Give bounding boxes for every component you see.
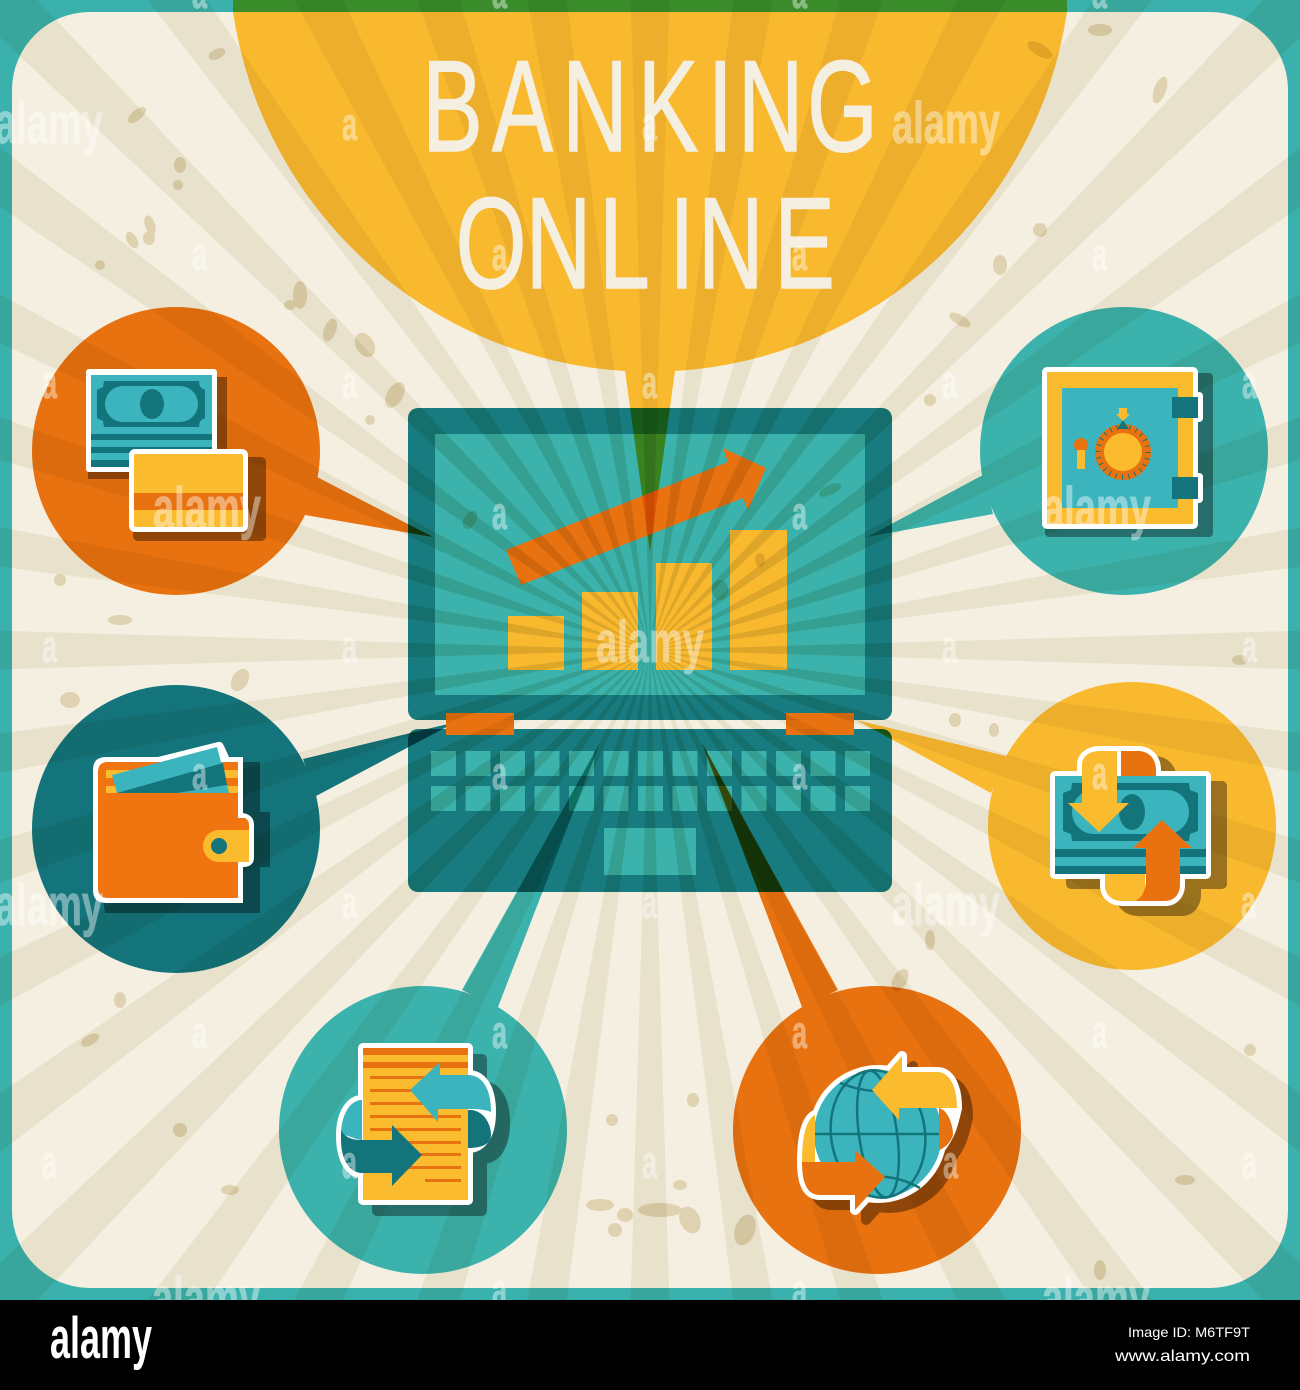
stock watermarks: a [492,487,507,539]
pointer overlaps on laptop [408,408,892,892]
stock watermarks: alamy [1043,476,1151,541]
stock watermarks: a [942,356,957,408]
stock watermarks: a [42,620,57,672]
stock watermarks: a [342,98,357,150]
stock watermarks: a [792,747,807,799]
stock watermarks: alamy [152,1266,260,1331]
stock watermarks: a [1242,1136,1257,1188]
icon: document with exchange arrows [341,1048,505,1211]
website: www.alamy.com [1114,1348,1250,1365]
bubble: global transfer, orange [702,743,1021,1274]
icon: wallet [93,742,270,913]
bubble: wallet, dark teal [32,685,456,973]
stock watermarks: a [1092,1006,1107,1058]
stock watermarks: a [1092,747,1107,799]
stock watermarks: a [642,1136,657,1188]
title line 2: ONLINE [456,170,835,316]
stock watermarks: a [1242,356,1257,408]
keyboard [431,751,870,811]
bubble: money and card, orange [32,307,433,595]
stock watermarks: a [342,1136,357,1188]
laptop screen [435,434,865,695]
laptop [408,408,892,892]
stock watermarks: a [792,1264,807,1316]
stock watermarks: a [192,1006,207,1058]
stock watermarks: a [492,228,507,280]
stock watermarks: alamy [892,873,1000,938]
title: Banking Online [422,33,878,316]
stock watermarks: alamy [153,476,261,541]
stock watermarks: a [642,356,657,408]
bubble: document exchange, teal [279,743,600,1274]
growth arrow [506,448,766,585]
laptop lid [408,408,892,720]
stock watermarks: a [792,228,807,280]
stock watermarks: alamy [892,91,1000,156]
footer bar [0,1300,1300,1390]
icon: banknote with exchange arrows [1055,751,1222,911]
bubble: safe, teal [867,307,1268,595]
stock watermarks: a [943,1136,958,1188]
icon: safe [1042,367,1213,537]
stock watermarks: a [1241,876,1256,928]
bar chart on screen [508,530,787,670]
image id: Image ID: M6TF9T [1128,1324,1250,1340]
icon: banknote and credit card [86,369,266,541]
title line 1: BANKING [422,33,878,179]
stock watermarks: alamy [596,610,704,675]
title bubble: yellow semicircle with pointer [233,0,1067,552]
stock watermarks: a [1242,620,1257,672]
stock watermarks: a [792,1006,807,1058]
icon: globe with transfer arrows [802,1056,968,1220]
stock watermarks: a [942,620,957,672]
touchpad [604,828,696,875]
laptop base [408,729,892,892]
stock watermarks: a [342,620,357,672]
stock watermarks: a [342,876,357,928]
bubble: money exchange, yellow [856,682,1276,970]
left hinge [446,713,514,735]
stock watermarks: a [642,98,657,150]
footer logo: alamy [50,1306,152,1371]
stock watermarks: a [492,747,507,799]
stock watermarks: a [342,356,357,408]
stock watermarks: a [642,876,657,928]
stock watermarks: a [192,747,207,799]
stock watermarks: a [492,1006,507,1058]
stock watermarks: a [492,1264,507,1316]
right hinge [786,713,854,735]
stock watermarks: a [1092,228,1107,280]
stock watermarks: a [792,487,807,539]
stock watermarks: a [42,1136,57,1188]
stock watermarks: a [192,228,207,280]
stock watermarks: alamy [1042,1266,1150,1331]
stock watermarks: a [42,356,57,408]
